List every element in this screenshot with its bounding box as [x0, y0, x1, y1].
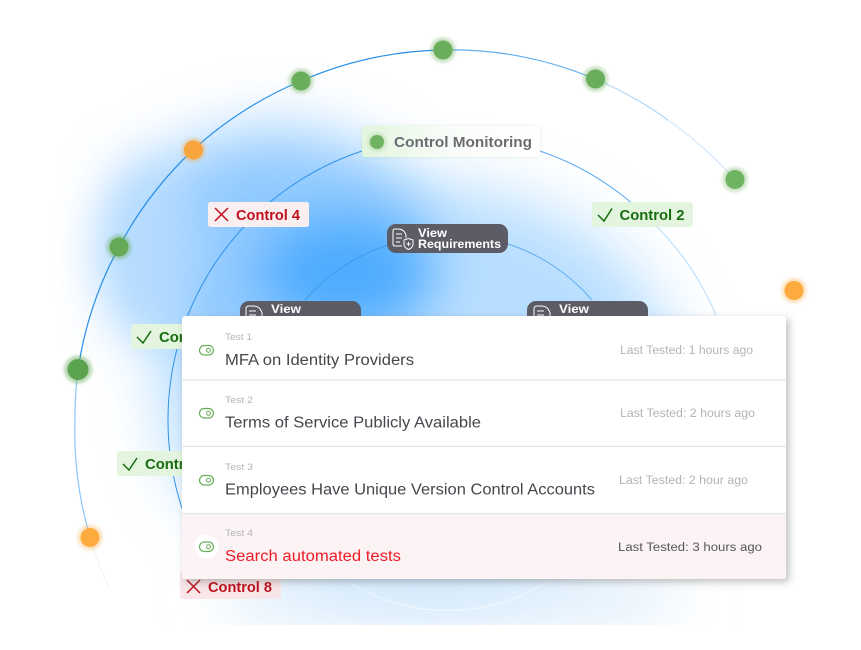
chip: control partly hidden lower: Control 6: [145, 457, 210, 473]
panel: test list card: [182, 316, 786, 579]
row 3: Employees Have Unique Version Control Accounts: Last Tested: 2 hour ago: [619, 475, 748, 487]
chip: control 2: Control 2: [620, 208, 684, 224]
chip: control partly hidden lower: [117, 451, 218, 476]
row 3: Employees Have Unique Version Control Accounts: [200, 462, 748, 498]
pill: view requirements left: [240, 301, 361, 330]
chip: control 8: [180, 572, 281, 599]
row 2: Terms of Service Publicly Available: [200, 395, 755, 432]
icon: document with shield: [393, 229, 413, 250]
chip: control monitoring: [362, 126, 540, 157]
inner orbit ring: [305, 244, 592, 611]
chip: control 4: Control 4: [236, 208, 300, 224]
middle orbit ring: [168, 151, 716, 608]
pill: view requirements top: [387, 224, 508, 253]
row 1: MFA on Identity Providers: MFA on Identity Providers: [225, 352, 414, 369]
row 4: Search automated tests: Test 4: [225, 528, 253, 539]
chip: control partly hidden upper: Control 1: [159, 330, 224, 346]
row 4 highlight: [182, 514, 786, 579]
blue background glow: [105, 130, 690, 624]
chip: control monitoring: Control Monitoring: [394, 134, 532, 151]
chip: control 2: [592, 202, 693, 227]
row 4: Search automated tests: [194, 528, 762, 565]
pill: view requirements top: Requirements: [418, 237, 501, 251]
outer orbit ring: [75, 50, 735, 590]
pill: view requirements top: View: [418, 226, 448, 240]
row 2: Terms of Service Publicly Available: Test 2: [225, 395, 253, 406]
row dividers: [182, 380, 786, 514]
row 2: Terms of Service Publicly Available: Last Tested: 2 hours ago: [620, 408, 755, 420]
chip: control partly hidden upper: [131, 324, 232, 349]
control monitoring infographic: [62, 36, 808, 625]
status dots on outer ring: [64, 38, 806, 550]
row 3: Employees Have Unique Version Control Accounts: Test 3: [225, 462, 253, 473]
pill: view requirements right: [527, 301, 648, 330]
row 1: MFA on Identity Providers: Last Tested: 1 hours ago: [620, 345, 753, 357]
chip: control 8: Control 8: [208, 580, 272, 596]
row 1: MFA on Identity Providers: [200, 332, 753, 369]
row 2: Terms of Service Publicly Available: Terms of Service Publicly Available: [225, 414, 481, 432]
row 3: Employees Have Unique Version Control Accounts: Employees Have Unique Version Control Accounts: [225, 482, 595, 498]
pill: view requirements left: View: [271, 302, 302, 316]
row 4: Search automated tests: Search automated tests: [225, 548, 401, 565]
pill: view requirements right: View: [559, 302, 590, 316]
row 1: MFA on Identity Providers: Test 1: [225, 332, 252, 343]
row 4: Search automated tests: Last Tested: 3 hours ago: [618, 542, 762, 554]
chip: control 4: [208, 202, 309, 227]
